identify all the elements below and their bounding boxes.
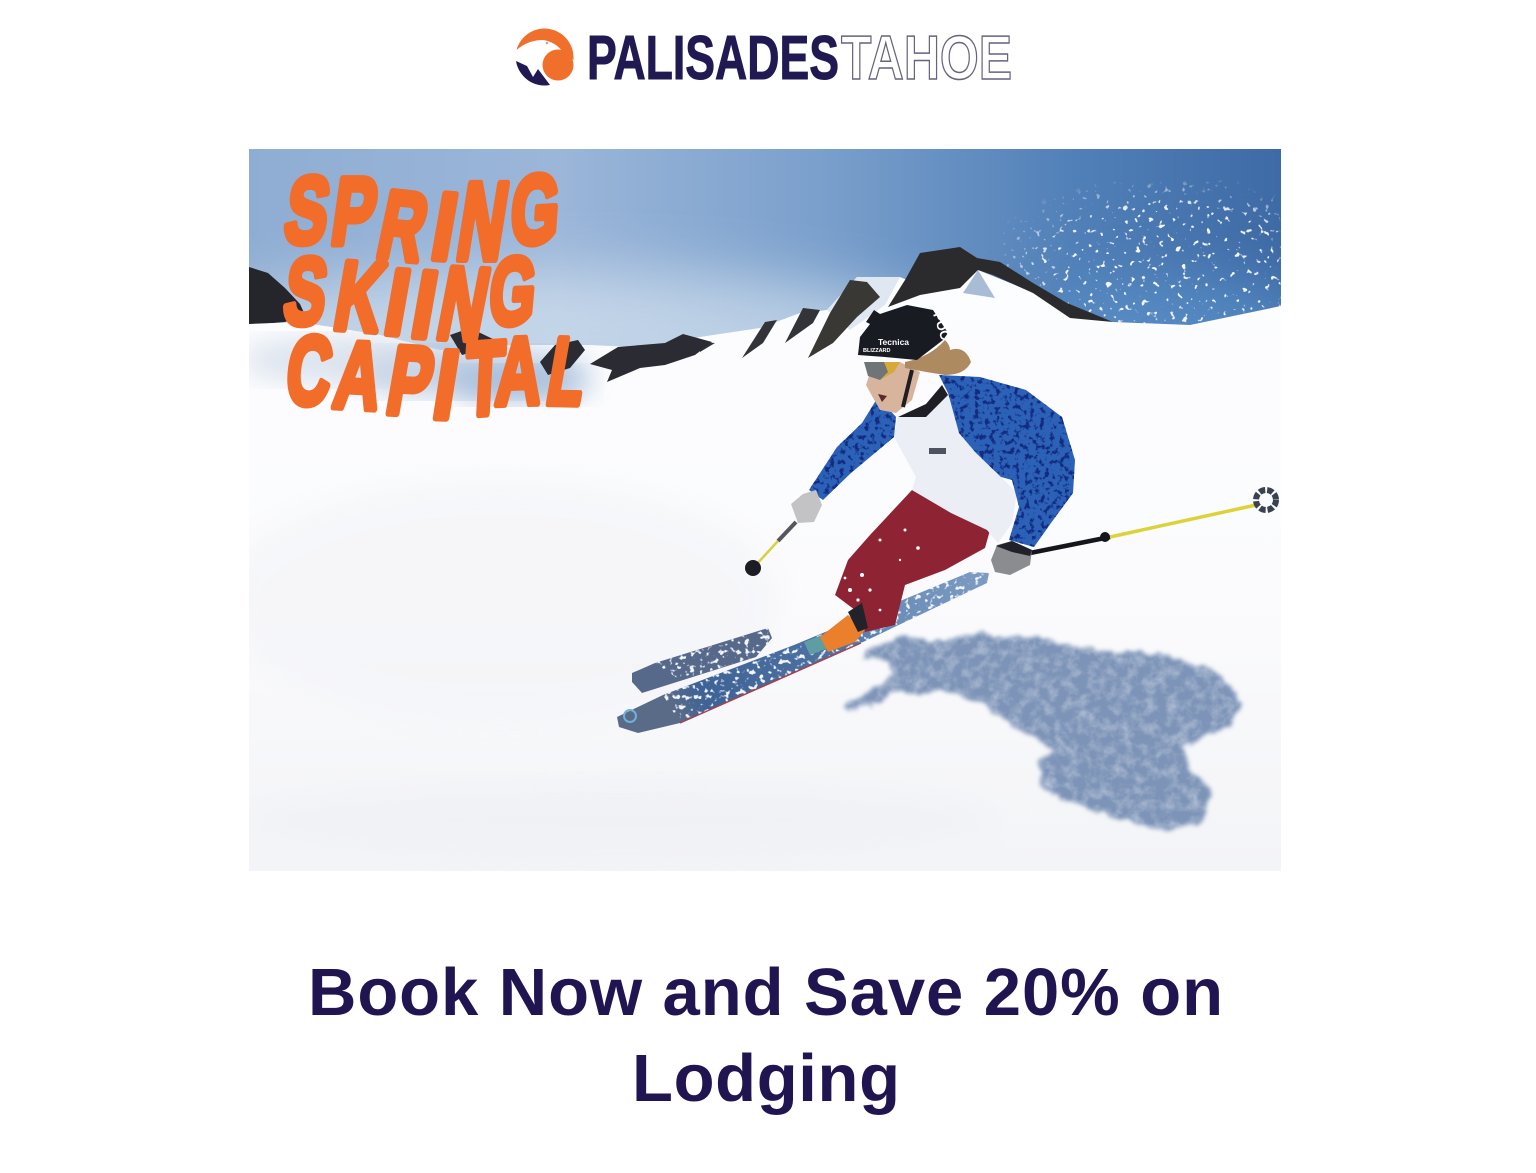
front ski bbox=[617, 572, 989, 733]
word: SPRING: P bbox=[326, 159, 383, 265]
icon: eagle head emblem bbox=[516, 29, 574, 85]
right pole bbox=[1030, 490, 1276, 553]
ski edge bbox=[680, 643, 861, 723]
word: CAPITAL: A bbox=[493, 318, 544, 426]
word: SPRING: I bbox=[425, 174, 464, 280]
ski tip logo bbox=[624, 710, 636, 722]
word: SKIING: I bbox=[405, 252, 444, 358]
helmet strap bbox=[903, 370, 912, 407]
logo: Palisades Tahoe bbox=[516, 24, 1012, 93]
chest logo bbox=[929, 448, 946, 454]
snow slope bbox=[249, 270, 1281, 871]
word: CAPITAL: L bbox=[540, 318, 595, 425]
helmet bbox=[858, 305, 953, 360]
helmet: Tecnica bbox=[878, 337, 909, 347]
ski graphics bbox=[656, 572, 989, 720]
word: SPRING: N bbox=[450, 161, 516, 283]
word: CAPITAL: T bbox=[463, 321, 507, 438]
helmet: BLIZZARD bbox=[863, 348, 891, 354]
word: CAPITAL: A bbox=[328, 323, 388, 430]
shadow of the skier bbox=[844, 633, 1240, 830]
word: CAPITAL: C bbox=[282, 317, 337, 425]
snow spray on trousers bbox=[844, 528, 920, 611]
word: SKIING: K bbox=[327, 241, 393, 353]
word: SKIING: S bbox=[279, 239, 333, 346]
skier bbox=[617, 305, 1276, 733]
hair bbox=[905, 340, 971, 375]
heading: offer: Lodging bbox=[632, 1041, 900, 1116]
left glove bbox=[791, 490, 822, 523]
snow spray in the sky bbox=[1002, 180, 1281, 324]
word: SKIING: G bbox=[485, 237, 540, 345]
back ski bbox=[632, 628, 772, 693]
dark collar bbox=[898, 385, 948, 417]
mountain ridge rocks bbox=[700, 247, 1113, 358]
right glove bbox=[991, 541, 1032, 575]
heading: offer bbox=[308, 955, 1223, 1116]
photo: skier on spring snow bbox=[249, 149, 1281, 871]
goggles bbox=[864, 362, 900, 380]
word: SPRING bbox=[284, 171, 558, 265]
word: CAPITAL: P bbox=[380, 327, 441, 436]
red trousers bbox=[835, 490, 990, 632]
word: SKIING bbox=[282, 254, 535, 344]
word: SKIING: N bbox=[430, 247, 498, 363]
sky bbox=[249, 149, 1281, 350]
word: CAPITAL: I bbox=[427, 331, 465, 439]
left pole bbox=[745, 522, 796, 576]
far left rock bbox=[249, 267, 305, 325]
heading: offer: Book Now and Save 20% on bbox=[308, 955, 1223, 1030]
white shirt bbox=[894, 395, 1017, 543]
wordmark: PALISADES: PALISADES bbox=[587, 24, 839, 93]
word: SPRING: G bbox=[508, 155, 563, 266]
binding bbox=[804, 635, 828, 655]
word: CAPITAL bbox=[287, 332, 582, 422]
word: SPRING: S bbox=[279, 158, 336, 264]
word: SPRING: R bbox=[369, 171, 436, 282]
helmet: POC bbox=[930, 310, 953, 342]
neck and face bbox=[866, 362, 920, 413]
campaign headline: Spring Skiing Capital bbox=[282, 171, 582, 422]
word: SKIING: I bbox=[378, 251, 417, 355]
orange boot bbox=[820, 603, 868, 652]
wordmark: TAHOE outlined: TAHOE bbox=[841, 24, 1012, 93]
rocks on the middle ridge bbox=[450, 328, 712, 382]
blue jacket bbox=[805, 370, 1080, 550]
snow shading near ridge bbox=[220, 336, 1000, 860]
mouth bbox=[878, 394, 887, 402]
